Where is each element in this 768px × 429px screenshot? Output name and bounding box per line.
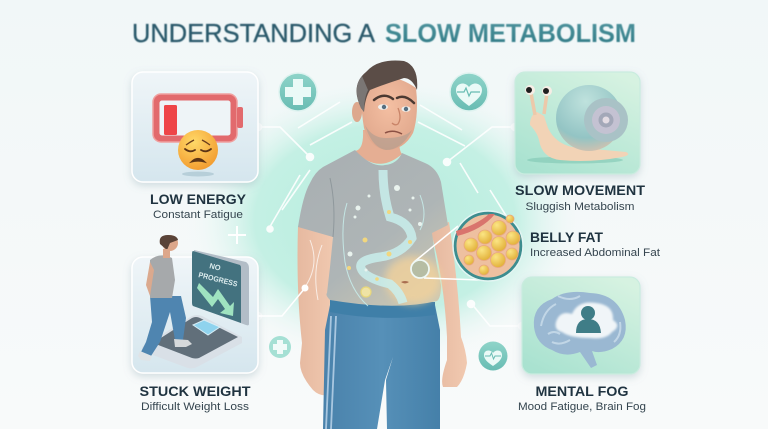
icon: no progress sign: PROGRESS — [198, 270, 239, 289]
icon: sad face — [178, 130, 218, 170]
title: SLOW METABOLISM — [385, 20, 636, 48]
icon: heart badge top — [450, 73, 488, 111]
navel — [401, 281, 409, 284]
heading: mental fog: MENTAL FOG — [536, 384, 628, 399]
panel: stuck weight — [132, 235, 258, 373]
head — [361, 77, 417, 150]
right arm — [432, 222, 467, 387]
callout: belly fat magnifier — [411, 211, 523, 281]
icon: plus badge bottom — [269, 336, 291, 358]
panel: mental fog — [522, 277, 640, 374]
icon: no progress sign: NO — [209, 261, 222, 273]
heading: low energy: LOW ENERGY — [150, 192, 246, 207]
eyebrows — [374, 96, 414, 103]
icon: brain — [534, 292, 626, 368]
figure: man on scale — [138, 235, 192, 361]
icon: plus badge top — [279, 73, 317, 111]
circuit connector lines — [254, 102, 526, 330]
pants — [323, 305, 440, 429]
text: increased abdominal fat: Increased Abdominal Fat — [530, 247, 660, 259]
icon: heart badge bottom — [478, 342, 508, 370]
figure: central man — [258, 60, 467, 429]
icon: low battery — [153, 94, 243, 142]
panel: slow movement — [515, 72, 640, 174]
text: constant fatigue: Constant Fatigue — [153, 209, 243, 221]
text: mood fatigue brain fog: Mood Fatigue, Brain Fog — [518, 401, 646, 413]
hair — [357, 60, 417, 112]
sparkle — [228, 226, 246, 244]
heading: stuck weight: STUCK WEIGHT — [140, 384, 251, 399]
heading: belly fat: BELLY FAT — [530, 230, 604, 245]
digestive tract overlay — [343, 170, 424, 306]
heading: slow movement: SLOW MOVEMENT — [515, 183, 646, 198]
icon: snail — [525, 85, 628, 164]
nose and mouth — [392, 108, 400, 125]
belly glow — [385, 256, 441, 304]
title: UNDERSTANDING A — [132, 20, 375, 48]
ear — [352, 102, 362, 122]
neck — [355, 130, 402, 164]
arm circuit lines — [305, 240, 322, 300]
text: sluggish metabolism: Sluggish Metabolism — [526, 201, 634, 213]
title — [132, 20, 636, 48]
icon: no progress sign — [192, 250, 249, 325]
icon: scale — [142, 315, 242, 368]
shirt — [298, 150, 448, 306]
eyes — [378, 104, 388, 110]
left arm — [298, 226, 335, 395]
text: difficult weight loss: Difficult Weight Loss — [141, 401, 250, 413]
panel: low energy — [132, 72, 258, 182]
